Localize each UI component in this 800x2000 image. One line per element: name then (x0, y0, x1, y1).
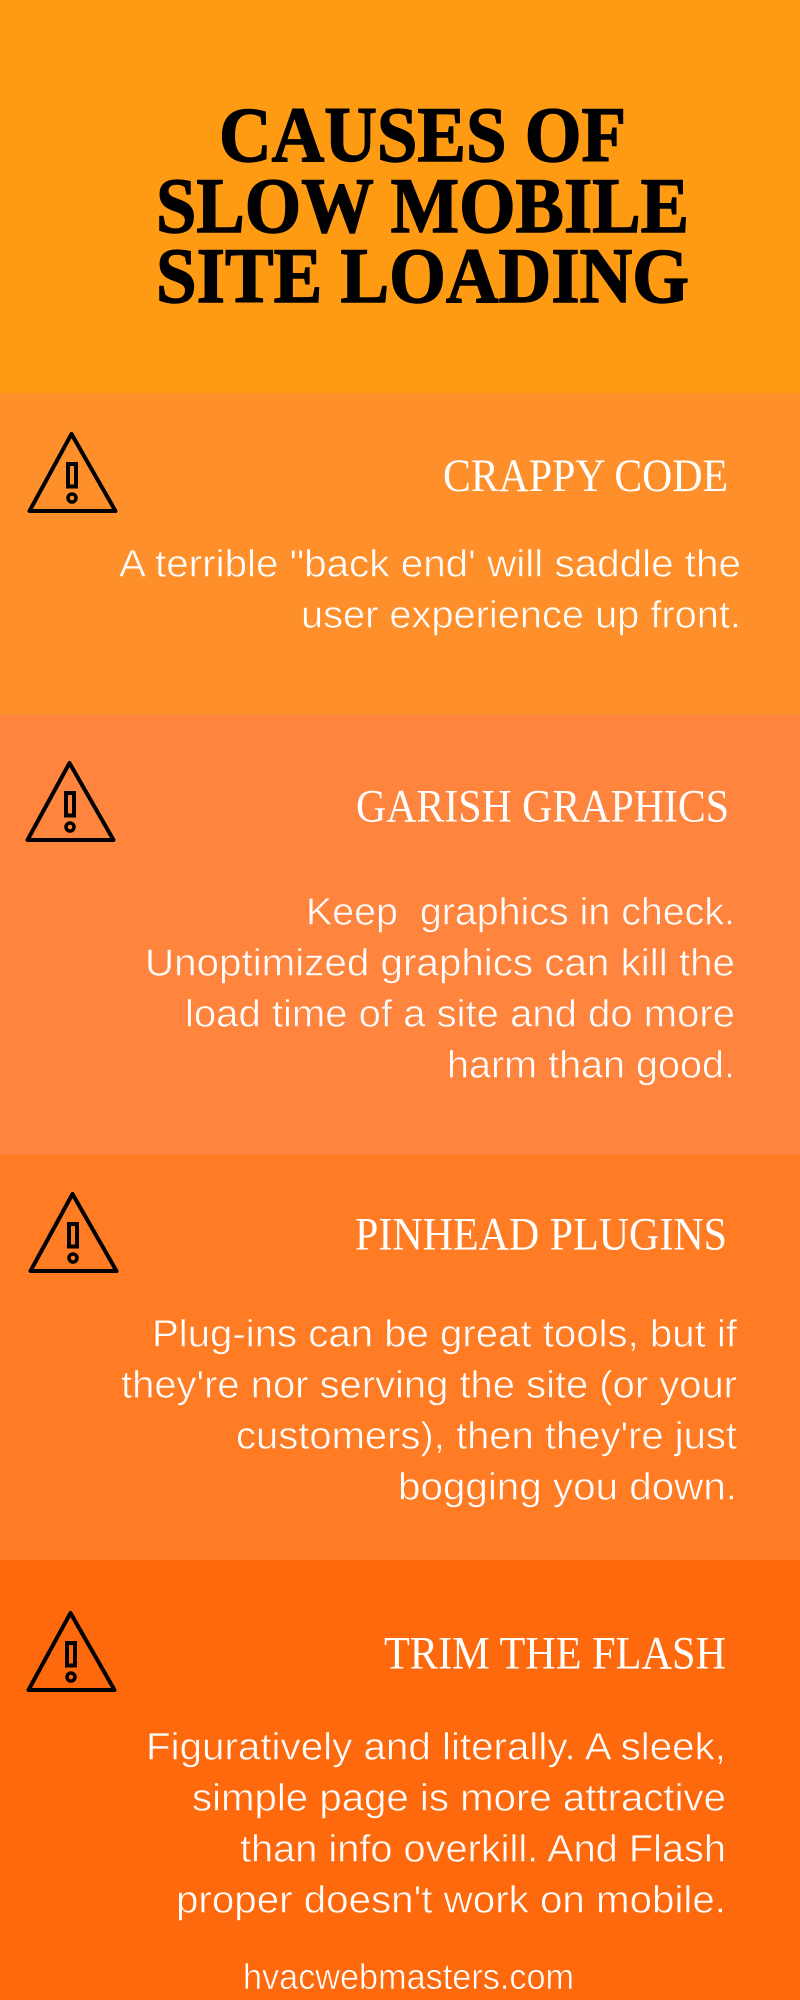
text: garish graphics description: Unoptimized graphics can kill the (145, 942, 735, 984)
text: trim the flash description: proper doesn't work on mobile. (176, 1880, 726, 1922)
text: pinhead plugins description: they're nor serving the site (or your (121, 1364, 737, 1406)
text: pinhead plugins description: customers), then they're just (236, 1416, 737, 1458)
title: SLOW MOBILE (156, 162, 689, 249)
panel: crappy code (0, 393, 800, 715)
footer: website: hvacwebmasters.com (243, 1956, 574, 1997)
icon: warning triangle (28, 763, 114, 840)
text: pinhead plugins description (121, 1314, 737, 1508)
text: pinhead plugins description: bogging you down. (398, 1466, 737, 1508)
text: crappy code description (119, 544, 741, 636)
heading: crappy code: CRAPPY CODE (443, 450, 728, 502)
title (156, 91, 689, 319)
text: crappy code description: A terrible "back end' will saddle the (119, 544, 741, 586)
icon: warning triangle (30, 434, 116, 511)
text: trim the flash description: than info overkill. And Flash (240, 1828, 726, 1870)
heading: garish graphics: GARISH GRAPHICS (356, 780, 729, 832)
heading: pinhead plugins: PINHEAD PLUGINS (355, 1208, 727, 1260)
text: trim the flash description (146, 1726, 726, 1922)
text: garish graphics description: harm than good. (447, 1044, 735, 1086)
text: garish graphics description (145, 892, 735, 1086)
panel: trim the flash (0, 1560, 800, 2000)
text: trim the flash description: Figuratively and literally. A sleek, (146, 1726, 726, 1768)
panel: title header (0, 0, 800, 393)
title: CAUSES OF (219, 91, 626, 178)
icon: warning triangle (30, 1194, 116, 1271)
panel: pinhead plugins (0, 1155, 800, 1560)
panel: garish graphics (0, 715, 800, 1155)
text: crappy code description: user experience up front. (301, 594, 741, 636)
text: garish graphics description: Keep graphics in check. (306, 892, 735, 934)
text: trim the flash description: simple page is more attractive (192, 1778, 726, 1820)
heading: trim the flash: TRIM THE FLASH (384, 1628, 726, 1680)
text: garish graphics description: load time of a site and do more (185, 994, 735, 1036)
icon: warning triangle (28, 1613, 114, 1690)
title: SITE LOADING (156, 232, 689, 319)
text: pinhead plugins description: Plug-ins can be great tools, but if (152, 1314, 737, 1356)
